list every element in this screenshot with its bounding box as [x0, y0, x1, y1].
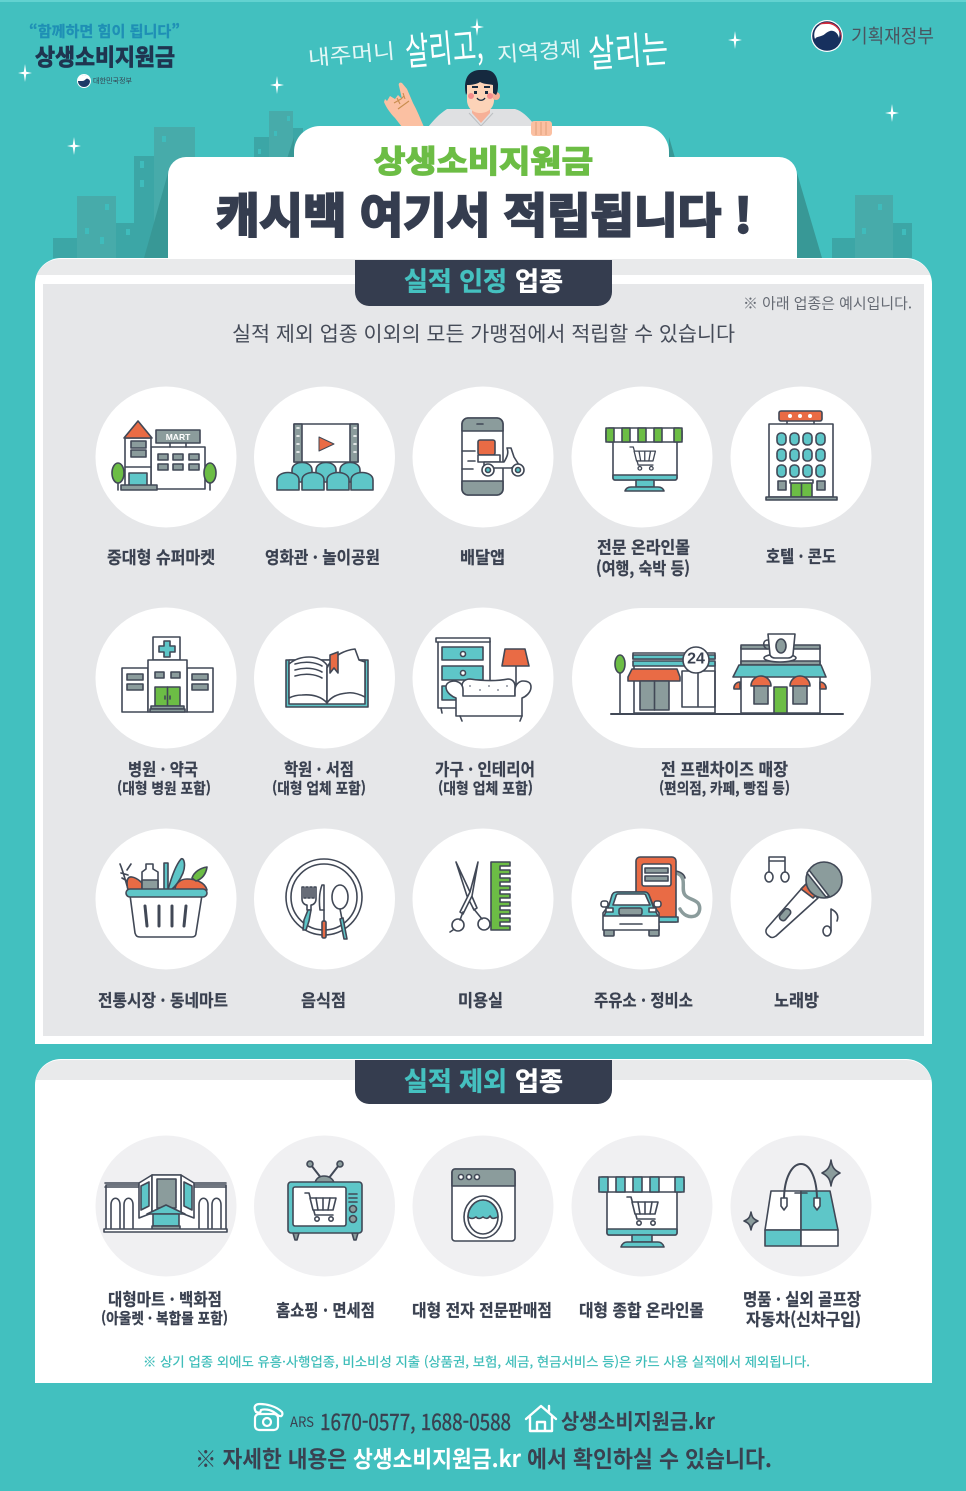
note: examples: ※ 아래 업종은 예시입니다.: [743, 292, 912, 314]
item: furniture and interior: [412, 608, 554, 798]
item: department store: [96, 1136, 236, 1328]
item: electronics store: [412, 1136, 554, 1322]
logo: campaign top left: 대한민국정부: [93, 76, 133, 86]
item: luxury, outdoor golf, cars: 자동차(신차구입): [746, 1306, 861, 1330]
item: home shopping: [254, 1136, 395, 1322]
item: academy and bookstore: (대형 업체 포함): [272, 778, 366, 798]
footer: contact and website: ARS: [290, 1412, 314, 1432]
item: gas station and repair: [572, 828, 712, 1012]
handwritten slogan: 내주머니: [307, 35, 396, 73]
item: large online mall: 대형 종합 온라인몰: [579, 1296, 704, 1322]
item: hair salon: 미용실: [458, 986, 503, 1012]
item: supermarket: [96, 386, 236, 568]
footer: contact and website: 상생소비지원금.kr: [561, 1406, 716, 1436]
item: hotel and condo: [730, 386, 872, 568]
tab heading: excluded: 업종: [515, 1062, 563, 1098]
item: karaoke: [730, 828, 872, 1012]
item: hair salon: [412, 828, 554, 1012]
footer: contact and website: [195, 1404, 772, 1474]
item: luxury, outdoor golf, cars: 명품 · 실외 골프장: [743, 1286, 861, 1310]
icon: telephone: [255, 1404, 282, 1430]
item: traditional market: [96, 828, 236, 1012]
logo: ministry top right: [811, 20, 934, 52]
footer: contact and website: 상생소비지원금.kr: [353, 1440, 522, 1474]
item: department store: (아울렛 · 복합몰 포함): [101, 1308, 228, 1328]
icon: house: [526, 1406, 556, 1431]
item: furniture and interior: (대형 업체 포함): [438, 778, 533, 798]
heading: main title: 캐시백 여기서 적립됩니다 !: [216, 178, 752, 246]
item: online mall: (여행, 숙박 등): [596, 554, 690, 580]
footer: contact and website: 1670-0577, 1688-0588: [320, 1405, 511, 1437]
item: online mall: 전문 온라인몰: [597, 534, 690, 558]
item: restaurant: 음식점: [301, 986, 346, 1012]
item: gas station and repair: 주유소 · 정비소: [594, 986, 693, 1012]
skyline: left and right buildings: [53, 111, 912, 258]
note: exclusion disclaimer: ※ 상기 업종 외에도 유흥·사행업종, 비소비성 지출 (상품권, 보험, 세금, 현금서비스 등)은 카드 사용 실적에서 제외됩니다.: [143, 1352, 810, 1370]
item: hospital and pharmacy: 병원 · 약국: [128, 756, 198, 780]
subtitle: 실적 제외 업종 이외의 모든 가맹점에서 적립할 수 있습니다: [232, 317, 735, 347]
header sign: white box with title: [168, 121, 797, 277]
handwritten slogan: 살리는: [586, 18, 670, 78]
footer: contact and website: 에서 확인하실 수 있습니다.: [527, 1440, 772, 1474]
item: cinema and amusement park: 영화관 · 놀이공원: [265, 544, 380, 568]
item: supermarket: 중대형 슈퍼마켓: [107, 544, 215, 568]
tab heading: excluded: [355, 1060, 612, 1104]
handwritten slogan: [307, 15, 670, 78]
item: all franchise stores: (편의점, 카페, 빵집 등): [659, 778, 790, 798]
logo: campaign top left: “함께하면 힘이 됩니다”: [29, 20, 180, 42]
item: hospital and pharmacy: [96, 608, 236, 798]
item: traditional market: 전통시장 · 동네마트: [98, 986, 228, 1012]
item: delivery app: [412, 386, 554, 568]
item: department store: 대형마트 · 백화점: [108, 1286, 222, 1310]
tab heading: included: 업종: [515, 262, 563, 298]
handwritten slogan: 지역경제: [496, 33, 582, 69]
item: academy and bookstore: [254, 608, 395, 798]
item: restaurant: [254, 828, 395, 1012]
tab heading: included: 실적 인정: [404, 262, 507, 298]
mascot: man pointing up behind sign: [384, 70, 533, 127]
item: furniture and interior: 가구 · 인테리어: [435, 756, 535, 780]
panel: included merchants: [35, 258, 932, 1044]
item: hospital and pharmacy: (대형 병원 포함): [117, 778, 211, 798]
panel: excluded merchants: [35, 1059, 932, 1383]
item: hotel and condo: 호텔 · 콘도: [766, 542, 836, 568]
tab heading: excluded: 실적 제외: [404, 1062, 507, 1098]
item: large online mall: [572, 1136, 712, 1322]
item: all franchise stores: [572, 608, 871, 798]
item: all franchise stores: 전 프랜차이즈 매장: [661, 756, 788, 780]
handwritten slogan: 살리고,: [403, 15, 485, 76]
icon: mascot hand holding the sign: [531, 121, 552, 136]
item: karaoke: 노래방: [774, 986, 819, 1012]
logo: campaign top left: 상생소비지원금: [35, 38, 175, 72]
footer: contact and website: ※ 자세한 내용은: [195, 1440, 347, 1474]
item: luxury, outdoor golf, cars: [730, 1136, 872, 1330]
item: all franchise stores: 24: [687, 650, 705, 668]
sparkles: [18, 18, 899, 155]
item: online mall: [572, 386, 712, 580]
logo: ministry top right: 기획재정부: [851, 22, 934, 48]
item: supermarket: MART: [166, 432, 191, 442]
tab heading: included: [355, 260, 612, 306]
item: electronics store: 대형 전자 전문판매점: [412, 1296, 552, 1322]
item: academy and bookstore: 학원 · 서점: [284, 756, 354, 780]
heading: program name: 상생소비지원금: [374, 136, 593, 182]
item: delivery app: 배달앱: [460, 544, 505, 568]
logo: campaign top left: [29, 20, 180, 88]
item: cinema and amusement park: [254, 386, 395, 568]
item: home shopping: 홈쇼핑 · 면세점: [276, 1296, 375, 1322]
